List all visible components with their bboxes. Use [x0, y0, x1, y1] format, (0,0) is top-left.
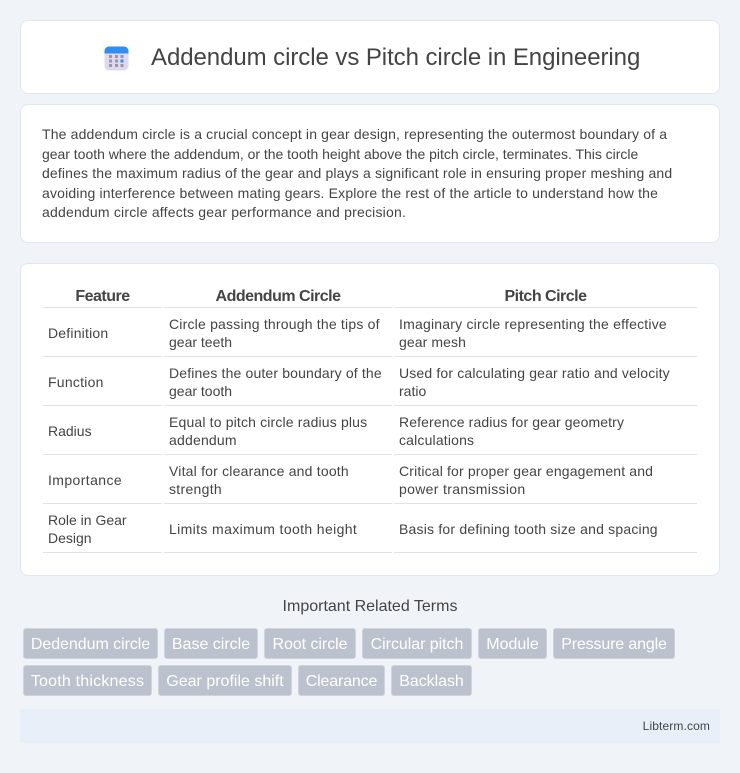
tag: Base circle: Base circle — [172, 636, 250, 653]
tag: Gear profile shift — [158, 665, 292, 696]
cell: Definition pitch: Imaginary circle representing the effective — [399, 316, 667, 332]
tag: Clearance: Clearance — [306, 673, 377, 690]
cell: Importance addendum: Vital for clearance and tooth — [169, 463, 349, 479]
intro paragraph: addendum circle affects gear performance and precision. — [42, 204, 406, 220]
intro paragraph: The addendum circle is a crucial concept in gear design, representing the outermost boundary of a — [42, 126, 667, 142]
cell: Definition pitch: gear mesh — [399, 334, 466, 350]
tag: Pressure angle — [553, 628, 675, 659]
cell: Function pitch: ratio — [399, 383, 426, 399]
tag: Dedendum circle: Dedendum circle — [31, 636, 150, 653]
header panel — [20, 20, 720, 94]
cell: Function pitch — [399, 365, 670, 399]
table header: Feature: Feature — [75, 288, 130, 305]
row: Radius: Radius — [48, 423, 92, 439]
cell: Role addendum: Limits maximum tooth height — [169, 521, 357, 537]
cell: Definition pitch — [399, 316, 667, 350]
tag: Circular pitch — [362, 628, 472, 659]
cell: Function addendum — [169, 365, 382, 399]
tag: Tooth thickness — [23, 665, 152, 696]
icon: calendar — [104, 46, 128, 70]
cell: Definition addendum — [169, 316, 380, 350]
footer credit: Libterm.com — [643, 719, 710, 733]
tag: Circular pitch: Circular pitch — [371, 636, 463, 653]
tag: Backlash — [391, 665, 472, 696]
cell: Radius pitch: Reference radius for gear geometry — [399, 414, 624, 430]
tag: Root circle: Root circle — [272, 636, 348, 653]
cell: Definition addendum: gear teeth — [169, 334, 232, 350]
row: Importance: Importance — [48, 472, 122, 488]
tag: Root circle — [264, 628, 356, 659]
row: Role in Gear Design: Design — [48, 530, 92, 546]
cell: Importance pitch: power transmission — [399, 481, 526, 497]
row: Function: Function — [48, 374, 104, 390]
cell: Radius pitch — [399, 414, 624, 448]
cell: Function pitch: Used for calculating gear ratio and velocity — [399, 365, 670, 381]
cell: Radius addendum: addendum — [169, 432, 237, 448]
intro paragraph: avoiding interference between mating gears. Explore the rest of the article to understand how the — [42, 185, 658, 201]
tag: Pressure angle: Pressure angle — [561, 636, 667, 653]
cell: Importance pitch: Critical for proper gear engagement and — [399, 463, 653, 479]
intro paragraph: defines the maximum radius of the gear and plays a significant role in ensuring proper meshing and — [42, 165, 672, 181]
cell: Importance addendum — [169, 463, 349, 497]
title: Addendum circle vs Pitch circle in Engineering — [151, 44, 640, 71]
intro paragraph: gear tooth where the addendum, or the tooth height above the pitch circle, terminates. This circle — [42, 146, 638, 162]
cell: Radius addendum: Equal to pitch circle radius plus — [169, 414, 367, 430]
table header: Pitch Circle: Pitch Circle — [504, 288, 587, 305]
comparison table panel — [20, 263, 720, 576]
tag: Tooth thickness: Tooth thickness — [31, 673, 144, 690]
cell: Function addendum: gear tooth — [169, 383, 232, 399]
cell: Definition addendum: Circle passing through the tips of — [169, 316, 380, 332]
cell: Role pitch: Basis for defining tooth size and spacing — [399, 521, 658, 537]
tag: Gear profile shift: Gear profile shift — [166, 673, 284, 690]
tag: Module: Module — [486, 636, 539, 653]
row: Role in Gear Design: Role in Gear — [48, 512, 127, 528]
row: Definition: Definition — [48, 325, 108, 341]
related terms heading: Important Related Terms — [283, 598, 457, 615]
tag: Base circle — [164, 628, 258, 659]
cell: Radius pitch: calculations — [399, 432, 474, 448]
tag: Clearance — [298, 665, 385, 696]
intro paragraph — [42, 126, 672, 220]
intro text panel — [20, 104, 720, 243]
cell: Function addendum: Defines the outer boundary of the — [169, 365, 382, 381]
cell: Importance addendum: strength — [169, 481, 222, 497]
cell: Radius addendum — [169, 414, 367, 448]
cell: Importance pitch — [399, 463, 653, 497]
tag: Module — [478, 628, 547, 659]
tag: Dedendum circle — [23, 628, 158, 659]
table header: Addendum Circle: Addendum Circle — [216, 288, 340, 305]
footer bar — [20, 709, 720, 743]
row: Role in Gear Design — [48, 512, 127, 546]
tag: Backlash: Backlash — [399, 673, 464, 690]
